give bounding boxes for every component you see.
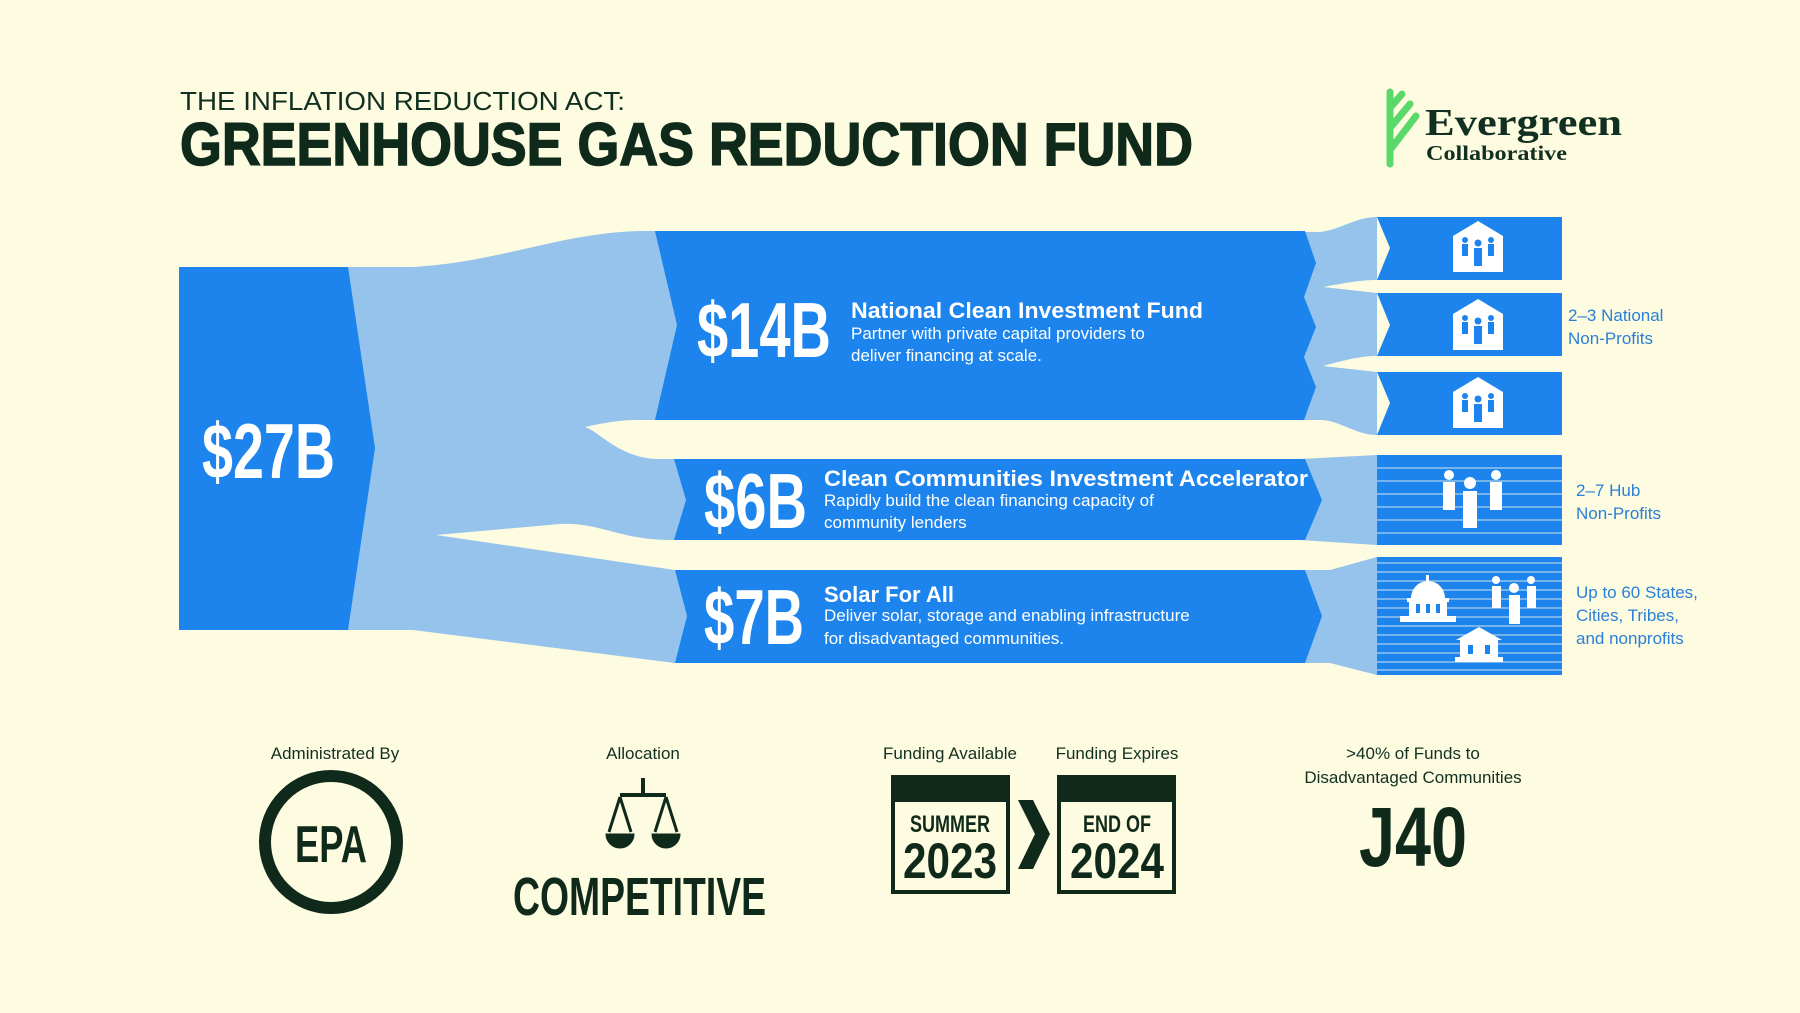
- calendar: summer 2023: SUMMER: [910, 811, 990, 838]
- box: $7B Solar For All: $7B: [704, 573, 804, 661]
- box: $6B Clean Communities Investment Accelerator: Clean Communities Investment Accelerator: [824, 466, 1308, 491]
- calendar: end of 2024: END OF: [1083, 811, 1151, 838]
- box: $7B Solar For All: for disadvantaged communities.: [824, 629, 1064, 648]
- J40: J40: [1359, 790, 1467, 884]
- box: $14B National Clean Investment Fund: [655, 231, 1316, 420]
- labels: recipients: [1568, 306, 1698, 648]
- labels: recipients: and nonprofits: [1576, 629, 1684, 648]
- icon: people: [1443, 470, 1502, 528]
- J40: Disadvantaged Communities: [1304, 768, 1522, 787]
- title: THE INFLATION REDUCTION ACT:: [180, 86, 625, 116]
- administered by EPA: EPA: [295, 816, 367, 874]
- logo: Evergreen Collaborative: [1390, 92, 1622, 165]
- allocation competitive: [513, 744, 766, 927]
- funding timeline: Funding Expires: [1056, 744, 1178, 763]
- labels: recipients: Non-Profits: [1576, 504, 1661, 523]
- box: $14B National Clean Investment Fund: National Clean Investment Fund: [851, 298, 1203, 323]
- box: $6B Clean Communities Investment Accelerator: community lenders: [824, 513, 967, 532]
- flow: light blue connector: [340, 231, 700, 663]
- box: $14B National Clean Investment Fund: $14B: [697, 286, 831, 374]
- labels: recipients: Cities, Tribes,: [1576, 606, 1679, 625]
- funding timeline: Funding Available: [883, 744, 1017, 763]
- box: $6B Clean Communities Investment Accelerator: [674, 457, 1322, 545]
- right fans: [1300, 217, 1377, 435]
- states box: [1330, 557, 1562, 675]
- icon: scale: [606, 778, 680, 848]
- box: $7B Solar For All: Solar For All: [824, 582, 954, 607]
- calendar: summer 2023: 2023: [903, 833, 997, 889]
- calendar: end of 2024: 2024: [1070, 833, 1164, 889]
- icon: community houses: [1453, 221, 1503, 428]
- labels: recipients: 2–7 Hub: [1576, 481, 1640, 500]
- logo: Evergreen Collaborative: Evergreen: [1425, 102, 1622, 144]
- calendar: summer 2023: [891, 775, 1010, 892]
- funding timeline: [883, 744, 1178, 892]
- calendar: end of 2024: [1057, 775, 1176, 892]
- box: $6B Clean Communities Investment Accelerator: Rapidly build the clean financing capacity of: [824, 491, 1154, 510]
- title: GREENHOUSE GAS REDUCTION FUND: [180, 111, 1193, 178]
- administered by EPA: Administrated By: [271, 744, 400, 763]
- sankey flow diagram: [179, 217, 1562, 675]
- labels: recipients: 2–3 National: [1568, 306, 1663, 325]
- box: $27B: $27B: [202, 407, 335, 495]
- box: $27B: [179, 267, 375, 630]
- labels: recipients: Non-Profits: [1568, 329, 1653, 348]
- box: $14B National Clean Investment Fund: deliver financing at scale.: [851, 346, 1042, 365]
- box: $7B Solar For All: [675, 570, 1322, 663]
- box: $7B Solar For All: Deliver solar, storage and enabling infrastructure: [824, 606, 1190, 625]
- box: $14B National Clean Investment Fund: Partner with private capital providers to: [851, 324, 1145, 343]
- allocation competitive: COMPETITIVE: [513, 867, 766, 927]
- national non-profit boxes: [1377, 217, 1562, 435]
- logo: Evergreen Collaborative: Collaborative: [1426, 141, 1567, 165]
- title: [180, 86, 1193, 178]
- hub non-profit box: [1330, 455, 1562, 545]
- icon: capitol, people, building: [1400, 575, 1536, 662]
- arrow: [1018, 800, 1050, 869]
- J40: >40% of Funds to: [1346, 744, 1480, 763]
- administered by EPA: [265, 744, 400, 908]
- labels: recipients: Up to 60 States,: [1576, 583, 1698, 602]
- J40: [1304, 744, 1522, 884]
- allocation competitive: Allocation: [606, 744, 680, 763]
- box: $6B Clean Communities Investment Accelerator: $6B: [704, 457, 807, 545]
